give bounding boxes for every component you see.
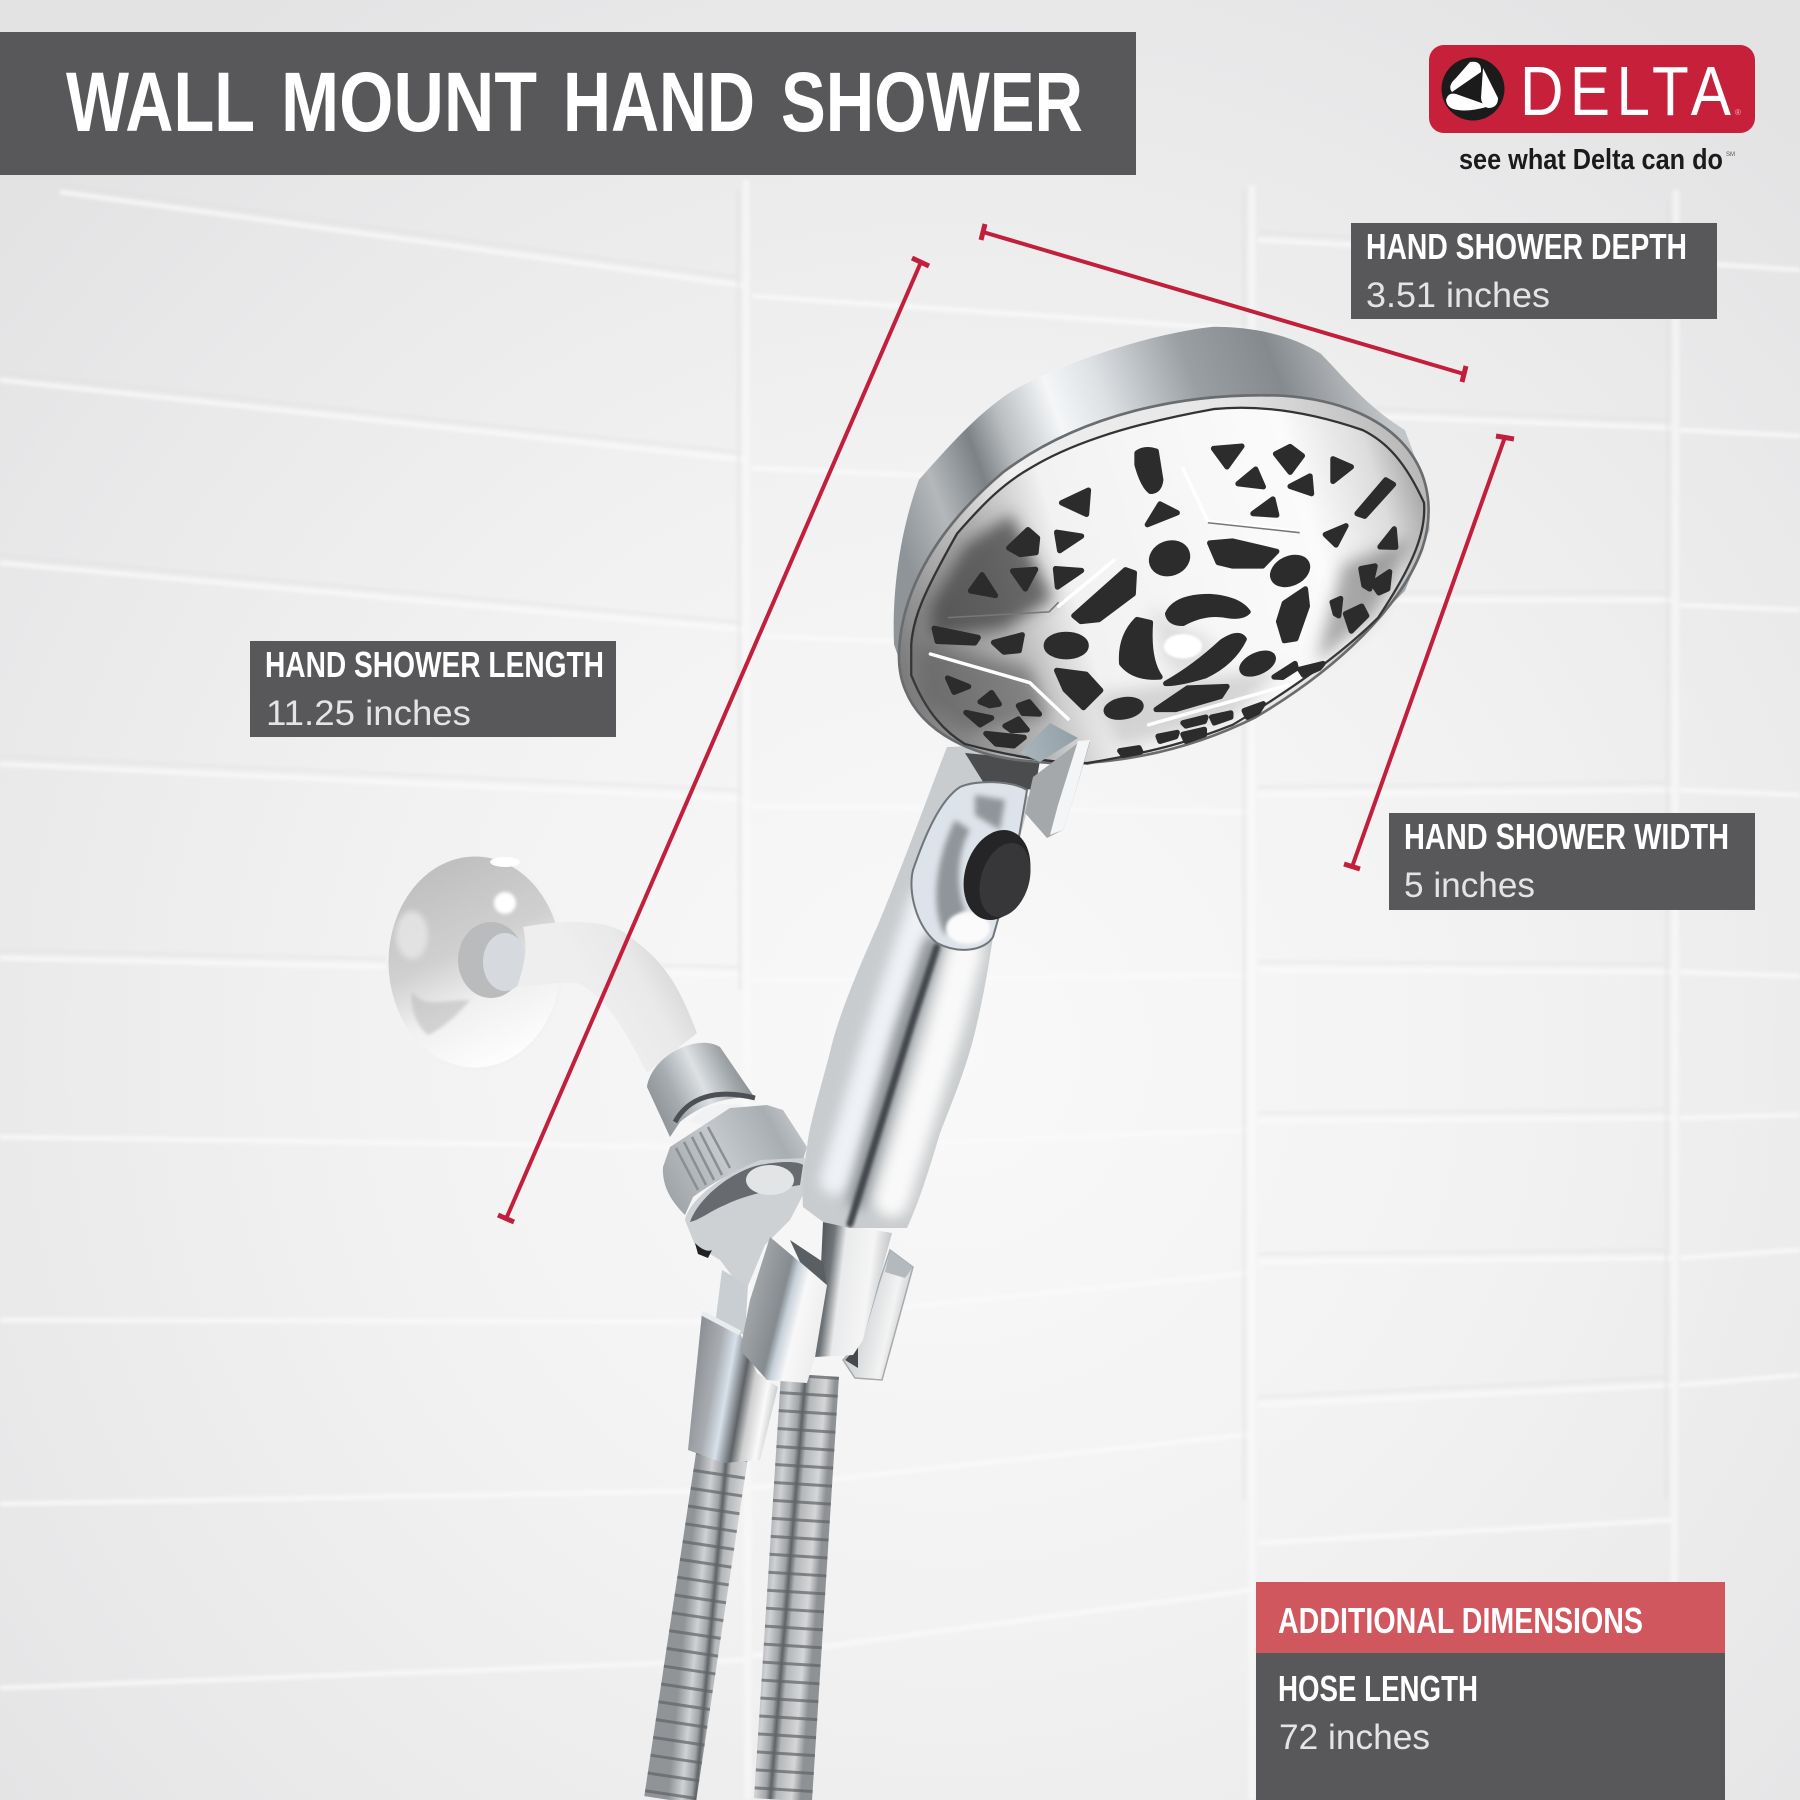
handle collar [815,1222,892,1357]
head back shell [894,327,1430,765]
icon: Delta triangle mark [1442,58,1504,120]
center highlight [1164,634,1202,659]
mount stem [715,1270,748,1335]
callout: hand shower length: HAND SHOWER LENGTH [265,644,604,685]
knurled nut [663,1105,807,1215]
Delta logo [1429,45,1755,133]
head rim [899,395,1429,763]
hose length: HOSE LENGTH [1278,1668,1478,1709]
clip back fin [843,1250,913,1380]
swivel collar shadow [690,1162,803,1222]
title banner: SHOWER [781,55,1083,149]
upper nut [647,1043,755,1137]
nut groove highlight [690,1104,745,1125]
callout: hand shower length [250,641,616,737]
flexible hoses [670,1375,810,1800]
wall flange and shower arm [387,855,697,1073]
title banner: HAND [563,55,755,149]
nozzle face [911,408,1424,763]
panel heading: ADDITIONAL DIMENSIONS [1278,1600,1643,1641]
hose length: 72 inches [1279,1718,1430,1757]
swivel mount [647,1043,807,1335]
registered mark: ® [1735,108,1741,117]
arm socket [458,922,524,998]
left hose [670,1455,722,1800]
notch [695,1243,712,1258]
title banner [0,32,1136,175]
callout: hand shower depth [1351,223,1717,319]
swivel body [685,1158,805,1293]
callout: hand shower width: 5 inches [1404,866,1535,905]
logo tagline: SM [1726,152,1735,158]
pocket highlight [946,912,990,944]
ridge highlights [930,468,1300,725]
panel heading [1256,1582,1725,1653]
callout: hand shower depth: 3.51 inches [1366,276,1550,315]
hose ferrule [688,1313,778,1463]
callout: hand shower width: HAND SHOWER WIDTH [1404,816,1729,857]
handle neck [965,753,1040,790]
callout: hand shower width [1389,813,1755,910]
dimension line: hand shower depth [981,224,1466,382]
arm socket chrome [483,933,527,991]
hose length [1256,1653,1725,1800]
right hose [783,1375,810,1800]
shower arm [517,922,697,1073]
face reflections [919,514,1413,748]
title banner: MOUNT [281,55,537,149]
logo wordmark: DELTA [1520,52,1737,130]
title banner: WALL [66,55,255,149]
knurl ridges [676,1127,730,1190]
panel: additional dimensions [1256,1582,1725,1800]
button pocket [911,782,1027,950]
hose clip arm [740,1237,827,1383]
wall flange [387,855,563,1069]
dimension line: hand shower length [498,258,929,1222]
handle body [803,745,1030,1228]
nut groove [675,1094,755,1122]
logo tagline: see what Delta can do [1459,144,1723,176]
shower head [894,327,1430,765]
dimension line: hand shower width [1344,436,1514,869]
pocket shading [936,795,1005,935]
callout: hand shower depth: HAND SHOWER DEPTH [1366,226,1687,267]
handle chrome highlights [835,900,966,1224]
callout: hand shower length: 11.25 inches [266,694,471,733]
mode button [953,822,1041,928]
spray nozzles [934,446,1396,755]
spray toggle [1020,723,1090,838]
swivel pivot [746,1165,794,1195]
handle [803,745,1041,1357]
